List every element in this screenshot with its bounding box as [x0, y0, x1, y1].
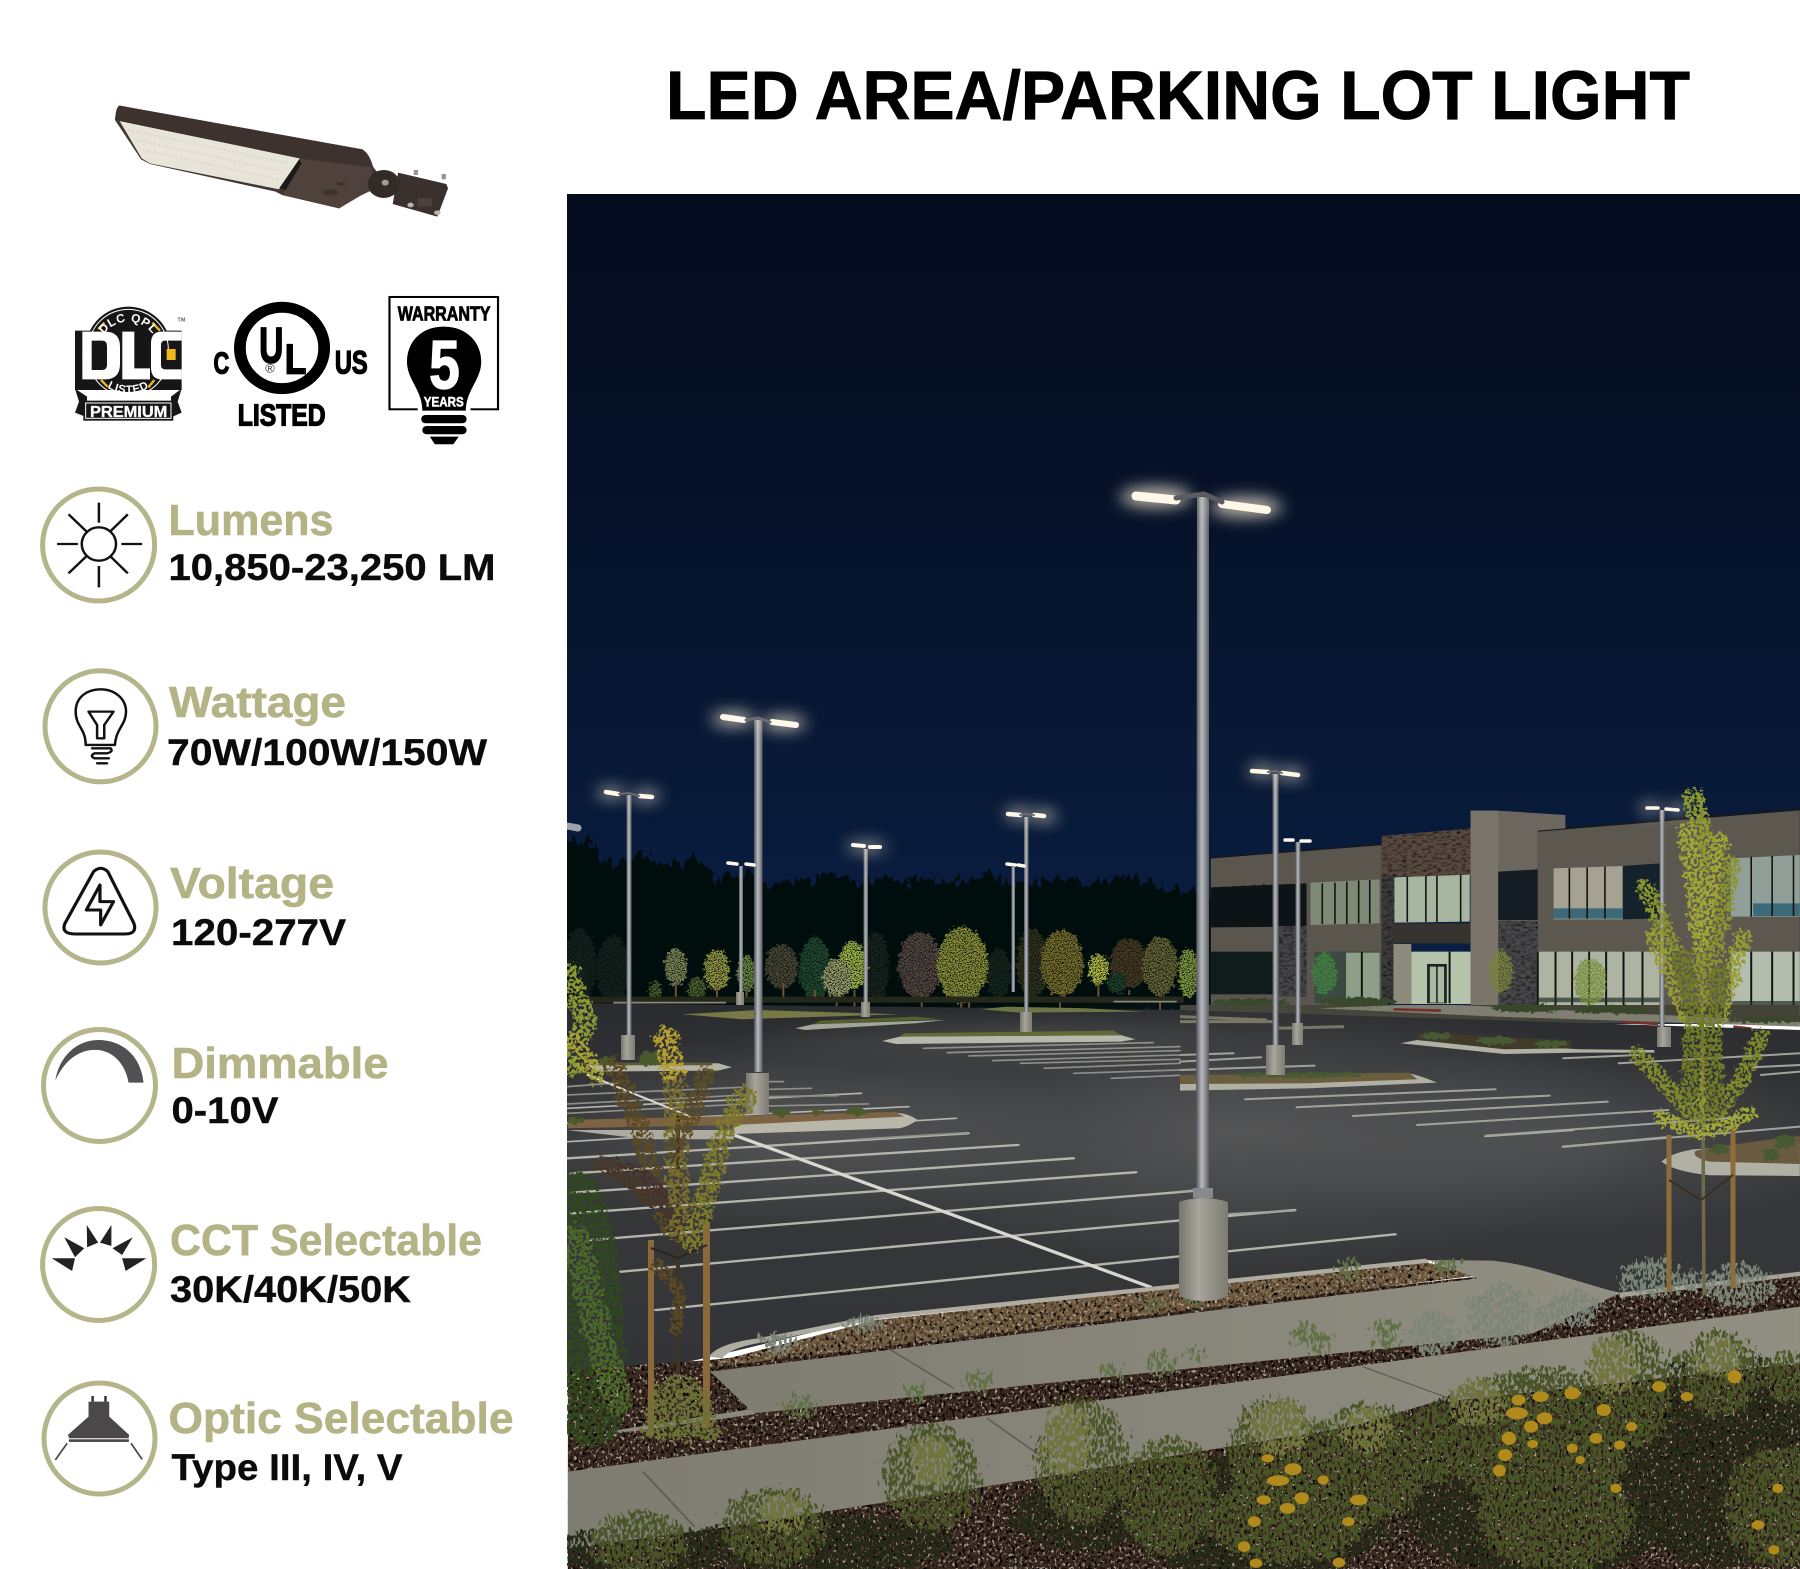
- far right curb: [1620, 1272, 1800, 1297]
- left foreground sapling: [600, 1040, 745, 1435]
- spec: CCT selectable: [43, 1208, 482, 1320]
- icon: lightning triangle: [45, 852, 156, 963]
- upper planting strip: [710, 1262, 1481, 1367]
- spec: CCT selectable: 30K/40K/50K: [170, 1269, 411, 1310]
- light poles and concrete bases: [621, 497, 1671, 1301]
- spec: optic selectable: Type III, IV, V: [172, 1447, 403, 1488]
- asphalt parking surface: [567, 1003, 1800, 1372]
- spec: wattage: 70W/100W/150W: [167, 732, 487, 773]
- badge: cULus listed: U: [259, 317, 283, 373]
- product image: LED area light fixture: [115, 106, 448, 217]
- badge: cULus listed: LISTED: [238, 398, 326, 432]
- icon: lamp with beam: [44, 1383, 155, 1494]
- left edge foliage: [570, 975, 618, 1410]
- badge: cULus listed: C: [213, 345, 229, 380]
- right foreground sapling: [1637, 797, 1761, 1295]
- foreground shrubs: [544, 1347, 1800, 1569]
- spec: CCT selectable: CCT Selectable: [170, 1216, 482, 1265]
- icon: light bulb: [45, 671, 156, 782]
- icon: rising sun rays: [43, 1208, 155, 1320]
- planted parking islands: [567, 1007, 1800, 1176]
- spec: voltage: Voltage: [170, 859, 334, 908]
- photo: parking lot at night: [520, 194, 1800, 1569]
- spec: voltage: [45, 852, 346, 963]
- spec: wattage: [45, 671, 487, 782]
- spec: optic selectable: [44, 1383, 514, 1494]
- badge: cULus listed: US: [335, 345, 368, 381]
- spec: dimmable: [44, 1030, 388, 1142]
- icon: sun: [43, 489, 155, 601]
- badge: cULus listed: L: [285, 337, 306, 383]
- forest silhouette: [536, 837, 1240, 1013]
- badge: 5 year warranty: 5: [429, 327, 460, 404]
- icon: dimmer arc: [44, 1030, 156, 1142]
- yellow flowers: [1238, 1370, 1783, 1568]
- badge: cULus listed: ®: [265, 362, 275, 376]
- badge: DLC premium: DLC QPL: [98, 314, 156, 334]
- asphalt light pools: [592, 1017, 1749, 1234]
- badge: DLC premium: LISTED: [108, 381, 148, 392]
- night sky: [567, 194, 1800, 1024]
- badge: cULus listed: [213, 307, 368, 432]
- spec: wattage: Wattage: [169, 678, 346, 727]
- badge: DLC premium: [75, 306, 186, 421]
- upper sidewalk: [710, 1260, 1620, 1413]
- fixture glow halos: [597, 487, 1689, 851]
- spec: lumens: Lumens: [168, 496, 334, 545]
- lower sidewalk: [568, 1307, 1800, 1548]
- small plants along walks: [758, 1258, 1773, 1419]
- dark mulch ground: [568, 1273, 1800, 1569]
- spec: lumens: 10,850-23,250 LM: [168, 547, 496, 588]
- spec: voltage: 120-277V: [171, 912, 346, 953]
- badge: 5 year warranty: WARRANTY: [398, 303, 491, 325]
- title: LED AREA/PARKING LOT LIGHT: [666, 57, 1690, 134]
- LED fixture heads: [567, 494, 1678, 866]
- parking stall lines: [568, 1043, 1800, 1310]
- badge: DLC premium: TM: [177, 318, 186, 324]
- badge: 5 year warranty: YEARS: [424, 395, 464, 410]
- spec: dimmable: 0-10V: [172, 1090, 279, 1131]
- office building: [1178, 809, 1800, 1029]
- badge: 5 year warranty: [389, 297, 498, 444]
- distant landscaped trees: [567, 924, 1184, 1010]
- spec: dimmable: Dimmable: [172, 1039, 388, 1088]
- mulch beds and sidewalks: [544, 1258, 1800, 1569]
- spec: lumens: [43, 489, 495, 601]
- badge: DLC premium: PREMIUM: [90, 404, 167, 421]
- spec: optic selectable: Optic Selectable: [168, 1394, 514, 1443]
- curb: [709, 1259, 1430, 1358]
- base shrub behind left sapling: [640, 1375, 720, 1440]
